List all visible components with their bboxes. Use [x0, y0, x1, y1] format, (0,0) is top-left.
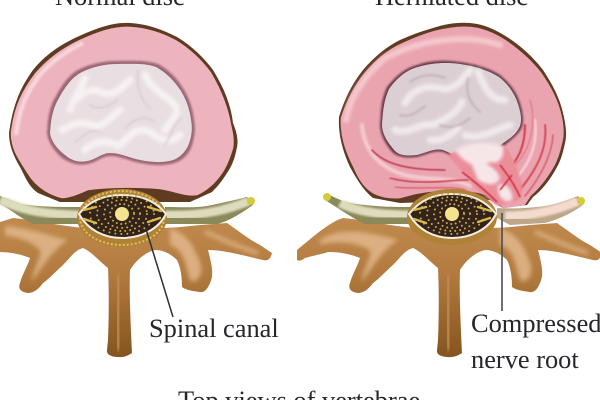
disc dark rim: [9, 23, 238, 202]
vertebra bone: [297, 218, 600, 357]
label: Compressed nerve root: Compressed: [471, 308, 600, 338]
vertebra bone: [0, 218, 272, 357]
spinal canal: [407, 189, 497, 245]
pointer line: compressed nerve root: [501, 213, 503, 311]
nerve roots: [0, 196, 255, 224]
herniated material: [448, 143, 522, 206]
nerve roots: [323, 193, 585, 225]
spinal canal: [77, 189, 167, 247]
annulus streaks: [346, 39, 553, 196]
label: Compressed nerve root: nerve root: [471, 344, 579, 374]
nucleus and herniation: [380, 61, 523, 206]
disc dark rim: [339, 23, 566, 208]
illustration: normal vertebra: [0, 23, 272, 357]
pointer line: spinal canal: [146, 229, 173, 317]
nucleus: [47, 61, 195, 165]
label: Spinal canal: Spinal canal: [149, 313, 279, 343]
disc annulus: [12, 28, 233, 197]
illustration: herniated vertebra: [297, 23, 600, 357]
disc annulus: [342, 28, 562, 207]
